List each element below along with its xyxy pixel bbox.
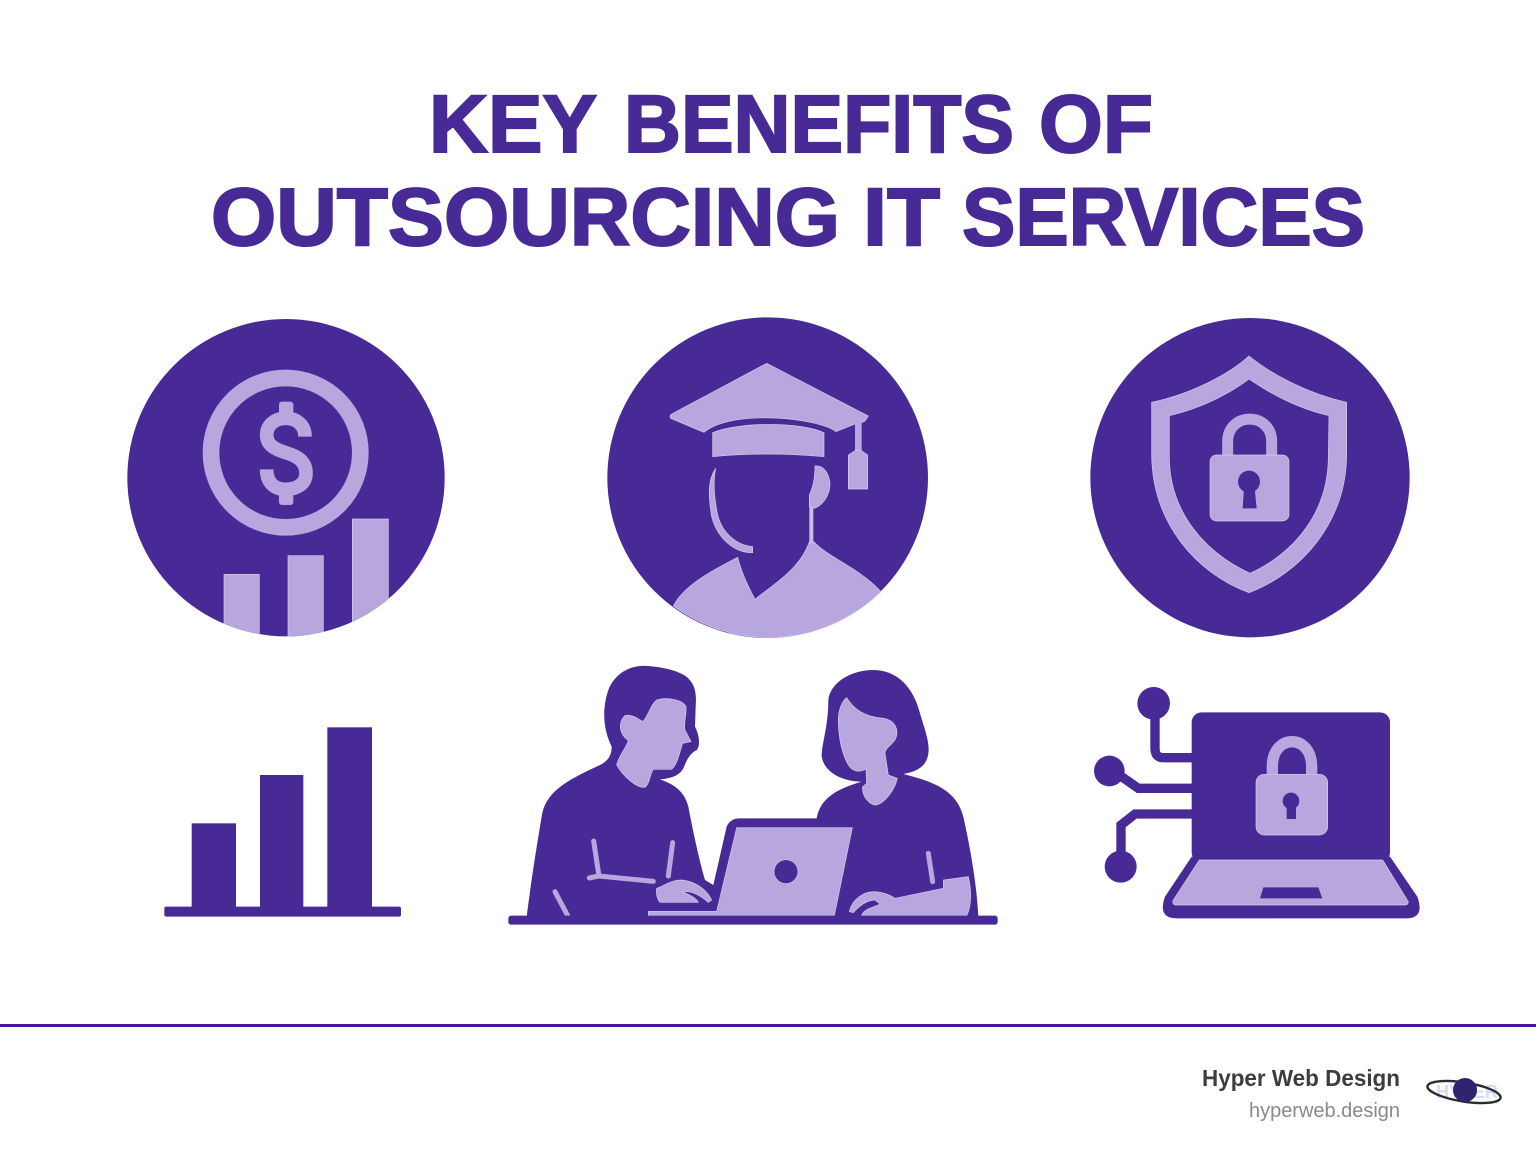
title: IT [863, 172, 940, 263]
logo [1426, 1077, 1502, 1107]
title: BENEFITS [624, 79, 1014, 170]
man [527, 666, 847, 917]
table [508, 916, 998, 925]
circuit nodes [1094, 687, 1193, 883]
icon: bar chart [164, 727, 401, 917]
icon: cost savings circle with dollar coin and rising bars [127, 319, 445, 642]
footer url: hyperweb.design [1249, 1100, 1400, 1122]
title [211, 79, 1365, 263]
title: OUTSOURCING [211, 172, 840, 263]
footer brand name: Hyper Web Design [1202, 1065, 1400, 1091]
illustration: two people collaborating at a laptop [508, 666, 998, 925]
woman [817, 670, 978, 917]
laptop [648, 828, 852, 916]
padlock [1256, 742, 1328, 835]
icon: expertise circle with graduate silhouette [607, 317, 928, 638]
footer divider [0, 1024, 1536, 1027]
laptop screen [1192, 712, 1390, 862]
laptop base [1163, 857, 1420, 918]
icon: secure laptop with circuit nodes [1094, 687, 1420, 918]
icon: security circle with shield and padlock [1090, 318, 1410, 637]
title: SERVICES [962, 172, 1365, 263]
title: OF [1039, 79, 1153, 170]
title: KEY [429, 79, 597, 170]
logo: HYPER [1436, 1082, 1498, 1102]
